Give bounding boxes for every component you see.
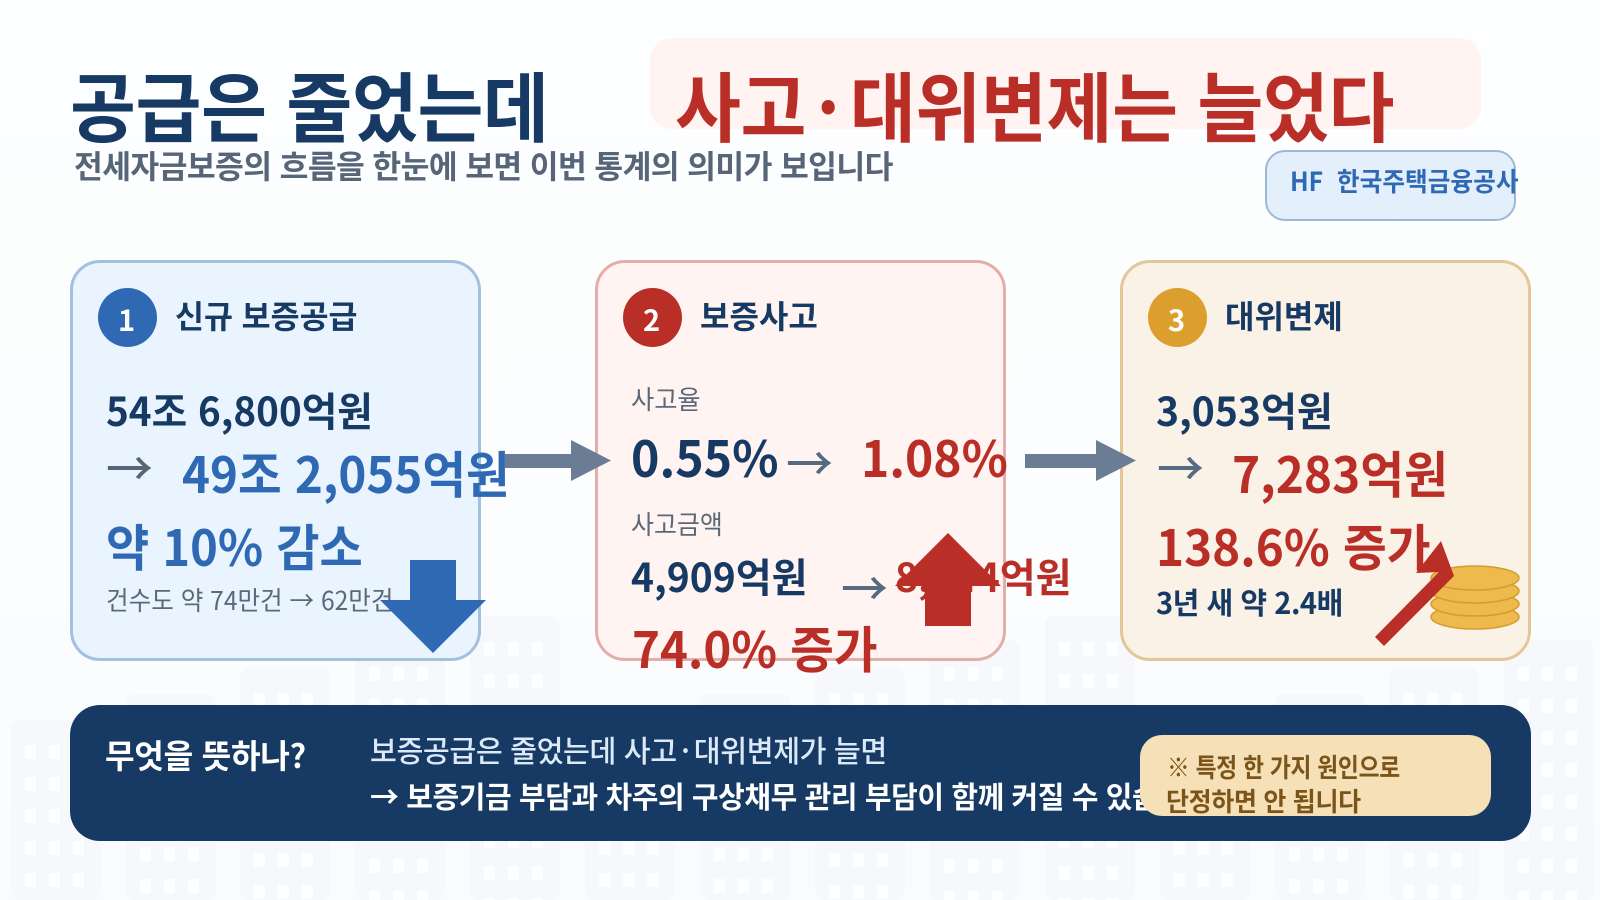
arrow: rate change: → xyxy=(786,426,833,495)
accident rate label: 사고율 xyxy=(631,380,701,417)
step 3 badge: 3 xyxy=(1168,298,1185,340)
step 1 badge: 1 xyxy=(118,298,135,340)
accident rate after: 1.08% xyxy=(861,420,1008,492)
accident increase: 74.0% 증가 xyxy=(632,611,877,683)
subrogation before: 3,053억원 xyxy=(1156,380,1333,438)
callout box xyxy=(1140,735,1491,816)
source badge xyxy=(1265,150,1516,221)
step 1 badge xyxy=(98,288,157,347)
step 2 heading: 보증사고 xyxy=(700,292,818,338)
supply after value: 49조 2,055억원 xyxy=(182,436,510,508)
arrow: amount change: → xyxy=(841,551,888,620)
panel: meaning band xyxy=(70,705,1531,841)
panel: subrogation xyxy=(1120,260,1531,661)
step 2 badge: 2 xyxy=(643,298,660,340)
band heading: 무엇을 뜻하나? xyxy=(105,730,306,778)
step 2 badge xyxy=(623,288,682,347)
supply change: 약 10% 감소 xyxy=(106,509,363,581)
step 3 heading: 대위변제 xyxy=(1225,292,1343,338)
arrow: supply change: → xyxy=(106,431,153,500)
arrow: subrogation change: → xyxy=(1157,431,1204,500)
case count note: 건수도 약 74만건 → 62만건 xyxy=(106,581,393,618)
subrogation after: 7,283억원 xyxy=(1232,436,1448,508)
accident amount before: 4,909억원 xyxy=(631,546,808,604)
supply before value: 54조 6,800억원 xyxy=(106,380,373,438)
source badge label: HF 한국주택금융공사 xyxy=(1290,162,1519,199)
multiple note: 3년 새 약 2.4배 xyxy=(1156,579,1343,623)
accident amount label: 사고금액 xyxy=(631,505,723,542)
title: accidents and subrogation rose: 사고·대위변제는 늘었다 xyxy=(675,48,1394,158)
band line 2: → 보증기금 부담과 차주의 구상채무 관리 부담이 함께 커질 수 있습니다 xyxy=(370,773,1211,817)
panel: guarantee accidents xyxy=(595,260,1006,661)
band line 1: 보증공급은 줄었는데 사고·대위변제가 늘면 xyxy=(370,727,887,771)
accident amount after: 8,544억원 xyxy=(895,546,1072,604)
panel: new guarantee supply xyxy=(70,260,481,661)
callout line 1: ※ 특정 한 가지 원인으로 xyxy=(1167,748,1400,785)
subrogation increase: 138.6% 증가 xyxy=(1156,509,1431,581)
callout line 2: 단정하면 안 됩니다 xyxy=(1166,782,1361,819)
step 1 heading: 신규 보증공급 xyxy=(175,292,357,338)
title: supply fell: 공급은 줄었는데 xyxy=(70,48,549,158)
accident rate before: 0.55% xyxy=(631,420,779,492)
step 3 badge xyxy=(1148,288,1207,347)
subtitle: 전세자금보증의 흐름을 한눈에 보면 이번 통계의 의미가 보입니다 xyxy=(74,142,893,188)
title highlight background xyxy=(650,38,1481,129)
